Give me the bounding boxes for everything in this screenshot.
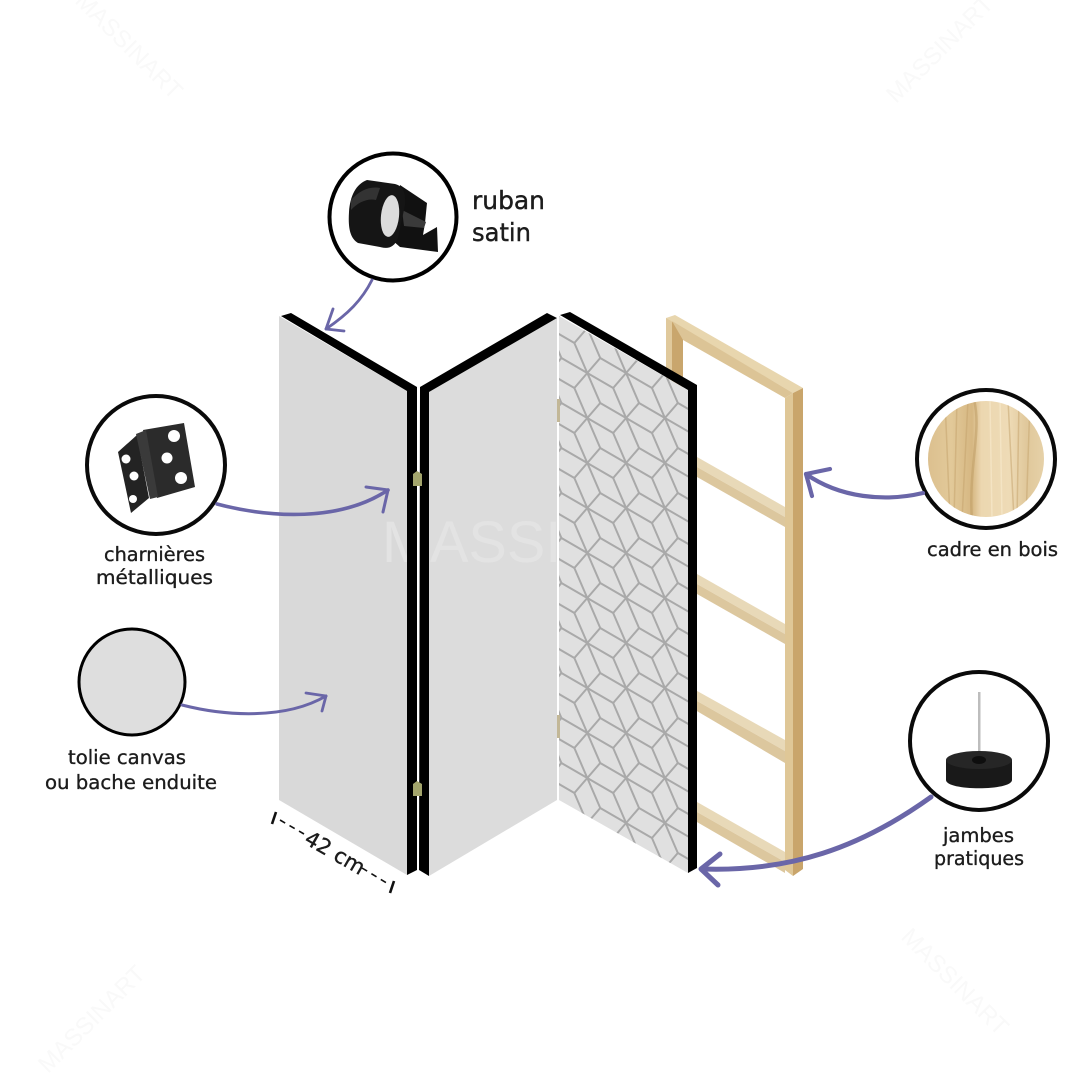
screen panel 2 xyxy=(429,318,557,876)
callout: charnières métalliques xyxy=(87,396,388,589)
arrow to frame foot xyxy=(701,797,931,885)
arrow to frame xyxy=(806,469,923,497)
watermark centre: MASSINART xyxy=(382,510,717,575)
icon: wood disc xyxy=(928,400,1044,520)
icon: ribbon roll xyxy=(349,180,438,252)
circle hinge xyxy=(87,396,225,534)
label toile canvas: ou bache enduite xyxy=(45,771,217,794)
watermarks: MASSINART xyxy=(896,923,1014,1041)
panel 1 black satin band xyxy=(281,313,417,875)
label toile canvas: tolie canvas xyxy=(68,746,186,769)
icon: foot with pin xyxy=(946,692,1012,788)
label jambes pratiques xyxy=(934,824,1024,870)
dimension ticks and dashes xyxy=(272,812,394,893)
wooden frame xyxy=(666,315,803,876)
circle leg xyxy=(910,672,1048,810)
circle ruban xyxy=(330,154,456,280)
circle canvas swatch xyxy=(79,629,185,735)
label ruban satin xyxy=(472,186,545,247)
label charnières métalliques xyxy=(96,543,213,589)
screen panel 1 xyxy=(279,316,407,875)
top rail xyxy=(666,315,803,398)
label ruban satin: ruban xyxy=(472,186,545,215)
label cadre en bois: cadre en bois xyxy=(927,538,1058,561)
icon: metal hinge xyxy=(118,423,195,513)
callout: cadre en bois xyxy=(806,390,1058,561)
callout: toile canvas xyxy=(45,629,326,794)
left post xyxy=(666,318,683,400)
label 42 cm: 42 cm xyxy=(301,826,369,880)
panel 2 black satin band xyxy=(419,313,557,876)
callout: jambes pratiques xyxy=(701,672,1048,885)
hinges xyxy=(413,399,560,796)
label toile canvas xyxy=(45,746,217,794)
watermarks: MASSINART xyxy=(33,960,151,1078)
label jambes pratiques: jambes xyxy=(942,824,1014,847)
panel 3 black satin band xyxy=(560,312,697,873)
dimension: 42 cm xyxy=(272,812,394,893)
circle wood xyxy=(917,390,1055,528)
callout: ruban satin xyxy=(326,154,545,331)
label charnières métalliques: métalliques xyxy=(96,566,213,589)
right post xyxy=(785,388,803,876)
arrow to panel xyxy=(182,693,326,714)
label charnières métalliques: charnières xyxy=(104,543,205,566)
frame rungs xyxy=(690,453,785,873)
arrow to hinge xyxy=(217,487,388,514)
arrow to band xyxy=(326,280,372,331)
label ruban satin: satin xyxy=(472,218,531,247)
label jambes pratiques: pratiques xyxy=(934,847,1024,870)
screen panel 3 with geometric pattern xyxy=(559,316,688,873)
